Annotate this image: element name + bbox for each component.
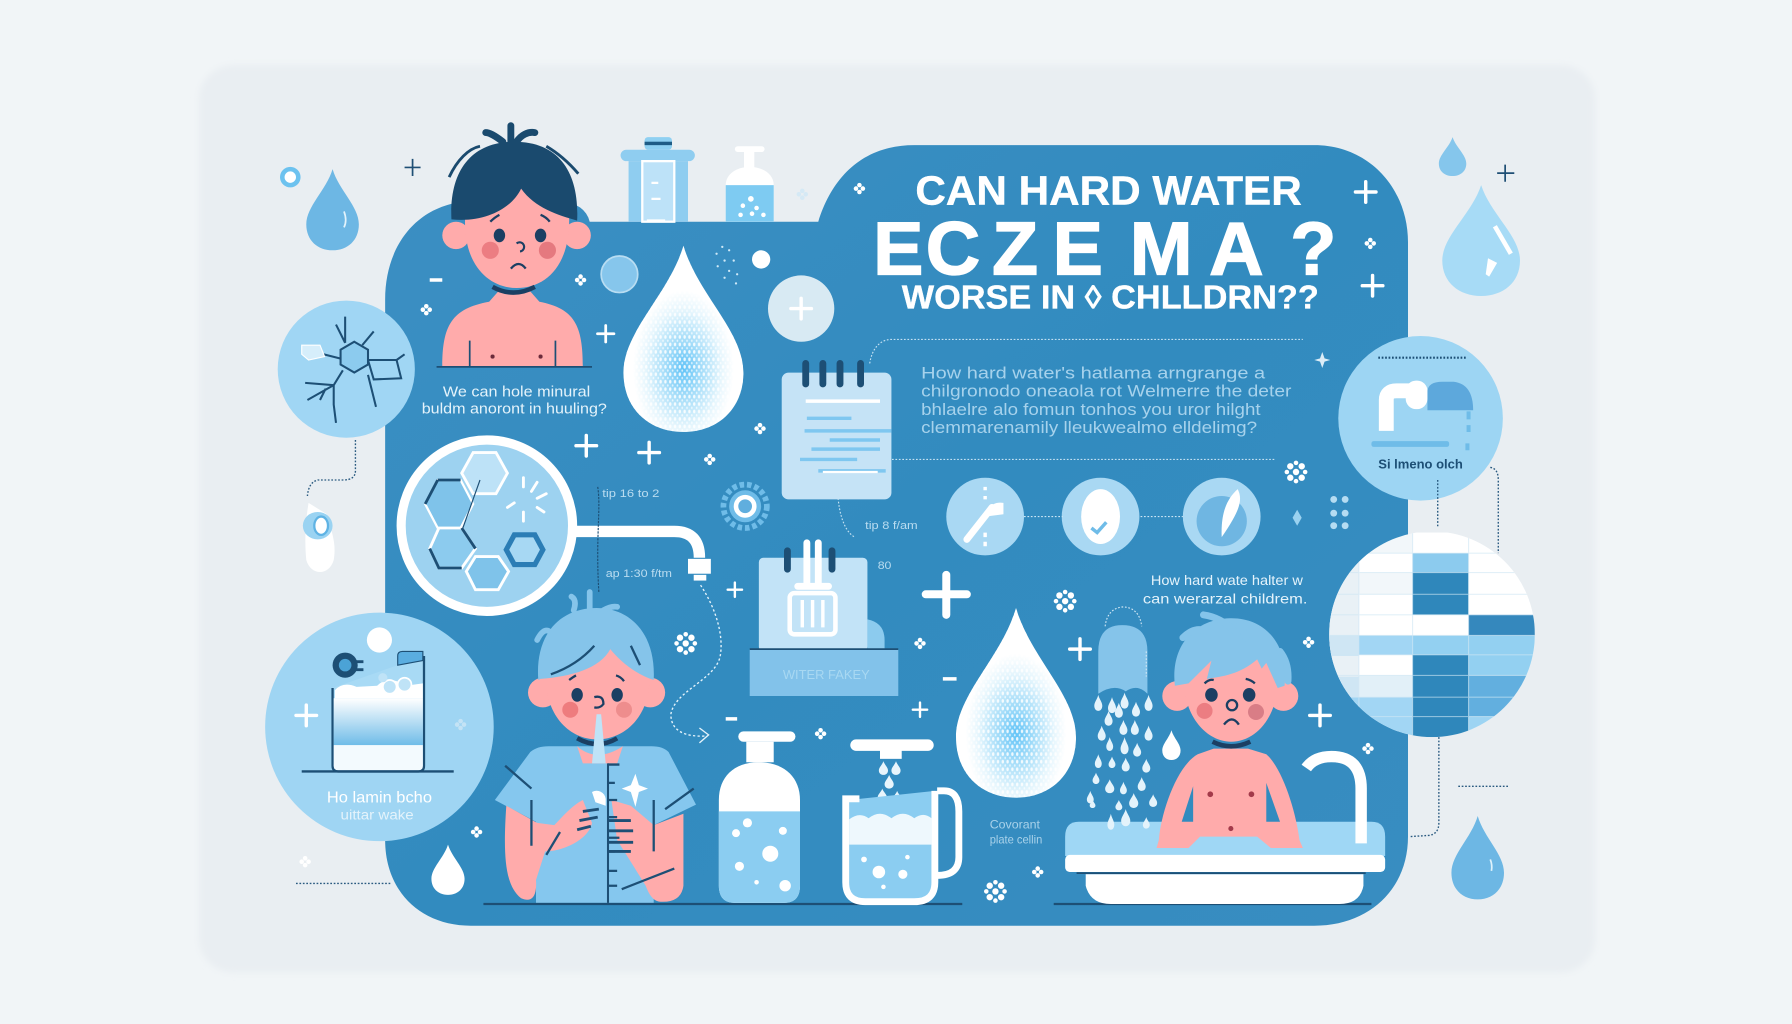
- icon: faucet pipe: [574, 531, 711, 581]
- icon: big pump bottle: [719, 731, 800, 903]
- icon: shower head and drops: [1087, 607, 1181, 830]
- panel: boy with eczema top: [437, 126, 592, 367]
- icon: jug with tap: [846, 739, 959, 902]
- panel: boy drinking with shirt: [495, 592, 696, 903]
- icon: glass jar: [621, 137, 695, 222]
- big plus: [926, 575, 967, 615]
- icon: cracked skin circle: [278, 301, 415, 438]
- caption: small: [990, 818, 1042, 846]
- icon: gear: [723, 485, 767, 528]
- icon: particles: [715, 246, 738, 285]
- decorative dot grid: [1330, 496, 1349, 529]
- decorative sparkles: [299, 183, 1376, 903]
- small labels: ap 1:30 f/tm: [606, 568, 672, 580]
- caption: small: plate cellin: [990, 832, 1042, 846]
- small labels: tip 16 to 2: [602, 488, 659, 500]
- dotted arrow: [671, 585, 721, 743]
- dotted vertical tick: [598, 487, 599, 592]
- intro paragraph: chilgronodo oneaola rot Welmerre the deter: [921, 382, 1292, 401]
- icon: small dropper left: [303, 503, 335, 572]
- faucet circle right: [1338, 336, 1503, 501]
- icon: water tank circle: [265, 613, 494, 841]
- caption: steps: How hard wate halter w: [1151, 573, 1304, 589]
- caption: steps: [1143, 573, 1307, 607]
- caption: steps: can werarzal childrem.: [1143, 591, 1307, 607]
- icon: drop left top: [306, 169, 359, 250]
- panel: boy in bath: [1157, 615, 1303, 848]
- dotted connector left: [307, 440, 355, 496]
- icon: speckled drop lower: [956, 608, 1076, 798]
- caption: small: Covorant: [990, 818, 1041, 832]
- small labels: [602, 488, 918, 580]
- icon: drops right: [1439, 137, 1520, 296]
- icon: magnifier with hexagon crystals: [401, 440, 573, 611]
- three step circles: [946, 478, 1261, 555]
- baseline: [483, 903, 1371, 905]
- icon: sparkle top: [797, 189, 808, 200]
- intro paragraph: clemmarenamily lleukwealmo elldelimg?: [921, 418, 1257, 437]
- caption: boy: [422, 385, 607, 418]
- icon: speckled drop top: [623, 246, 743, 432]
- title: [873, 168, 1336, 317]
- intro paragraph: How hard water's hatlama arngrange a: [921, 363, 1266, 382]
- icon: water softener box: WITER FAKEY: [783, 668, 870, 682]
- icon: navy plus: [405, 159, 421, 176]
- icon: white drop bottom left: [431, 845, 465, 895]
- dotted connectors right: [296, 467, 1510, 883]
- chart: grid circle: [1329, 533, 1535, 738]
- faucet circle right: Si lmeno olch: [1378, 458, 1463, 472]
- caption: boy: buldm anoront in huuling?: [422, 402, 607, 418]
- small labels: 80: [878, 560, 891, 572]
- main blue panel: [385, 145, 1408, 926]
- intro paragraph: [921, 363, 1292, 437]
- icon: ring: [282, 169, 298, 185]
- icon: drop bottom right: [1451, 816, 1504, 899]
- title: WORSE IN ◊ CHLLDRN??: [902, 280, 1319, 317]
- icon: bathtub: [1065, 757, 1385, 904]
- icon: water tank circle: uittar wake: [341, 807, 414, 822]
- icon: pump bottle: [726, 146, 774, 222]
- inner backdrop card: [199, 65, 1595, 973]
- title: CAN HARD WATER: [915, 168, 1302, 214]
- title: ECZE MA ?: [873, 206, 1336, 290]
- caption: boy: We can hole minural: [443, 385, 590, 401]
- intro paragraph: bhlaelre alo fomun tonhos you uror hilght: [921, 400, 1261, 419]
- icon: water softener box: [750, 543, 898, 696]
- icon: notepad: [782, 363, 891, 499]
- icon: water tank circle: Ho lamin bcho: [327, 789, 432, 806]
- dotted connectors around paragraph: [838, 339, 1303, 537]
- decorative plus marks: [430, 182, 1383, 726]
- small labels: tip 8 f/am: [865, 520, 918, 532]
- circles top: [601, 250, 834, 342]
